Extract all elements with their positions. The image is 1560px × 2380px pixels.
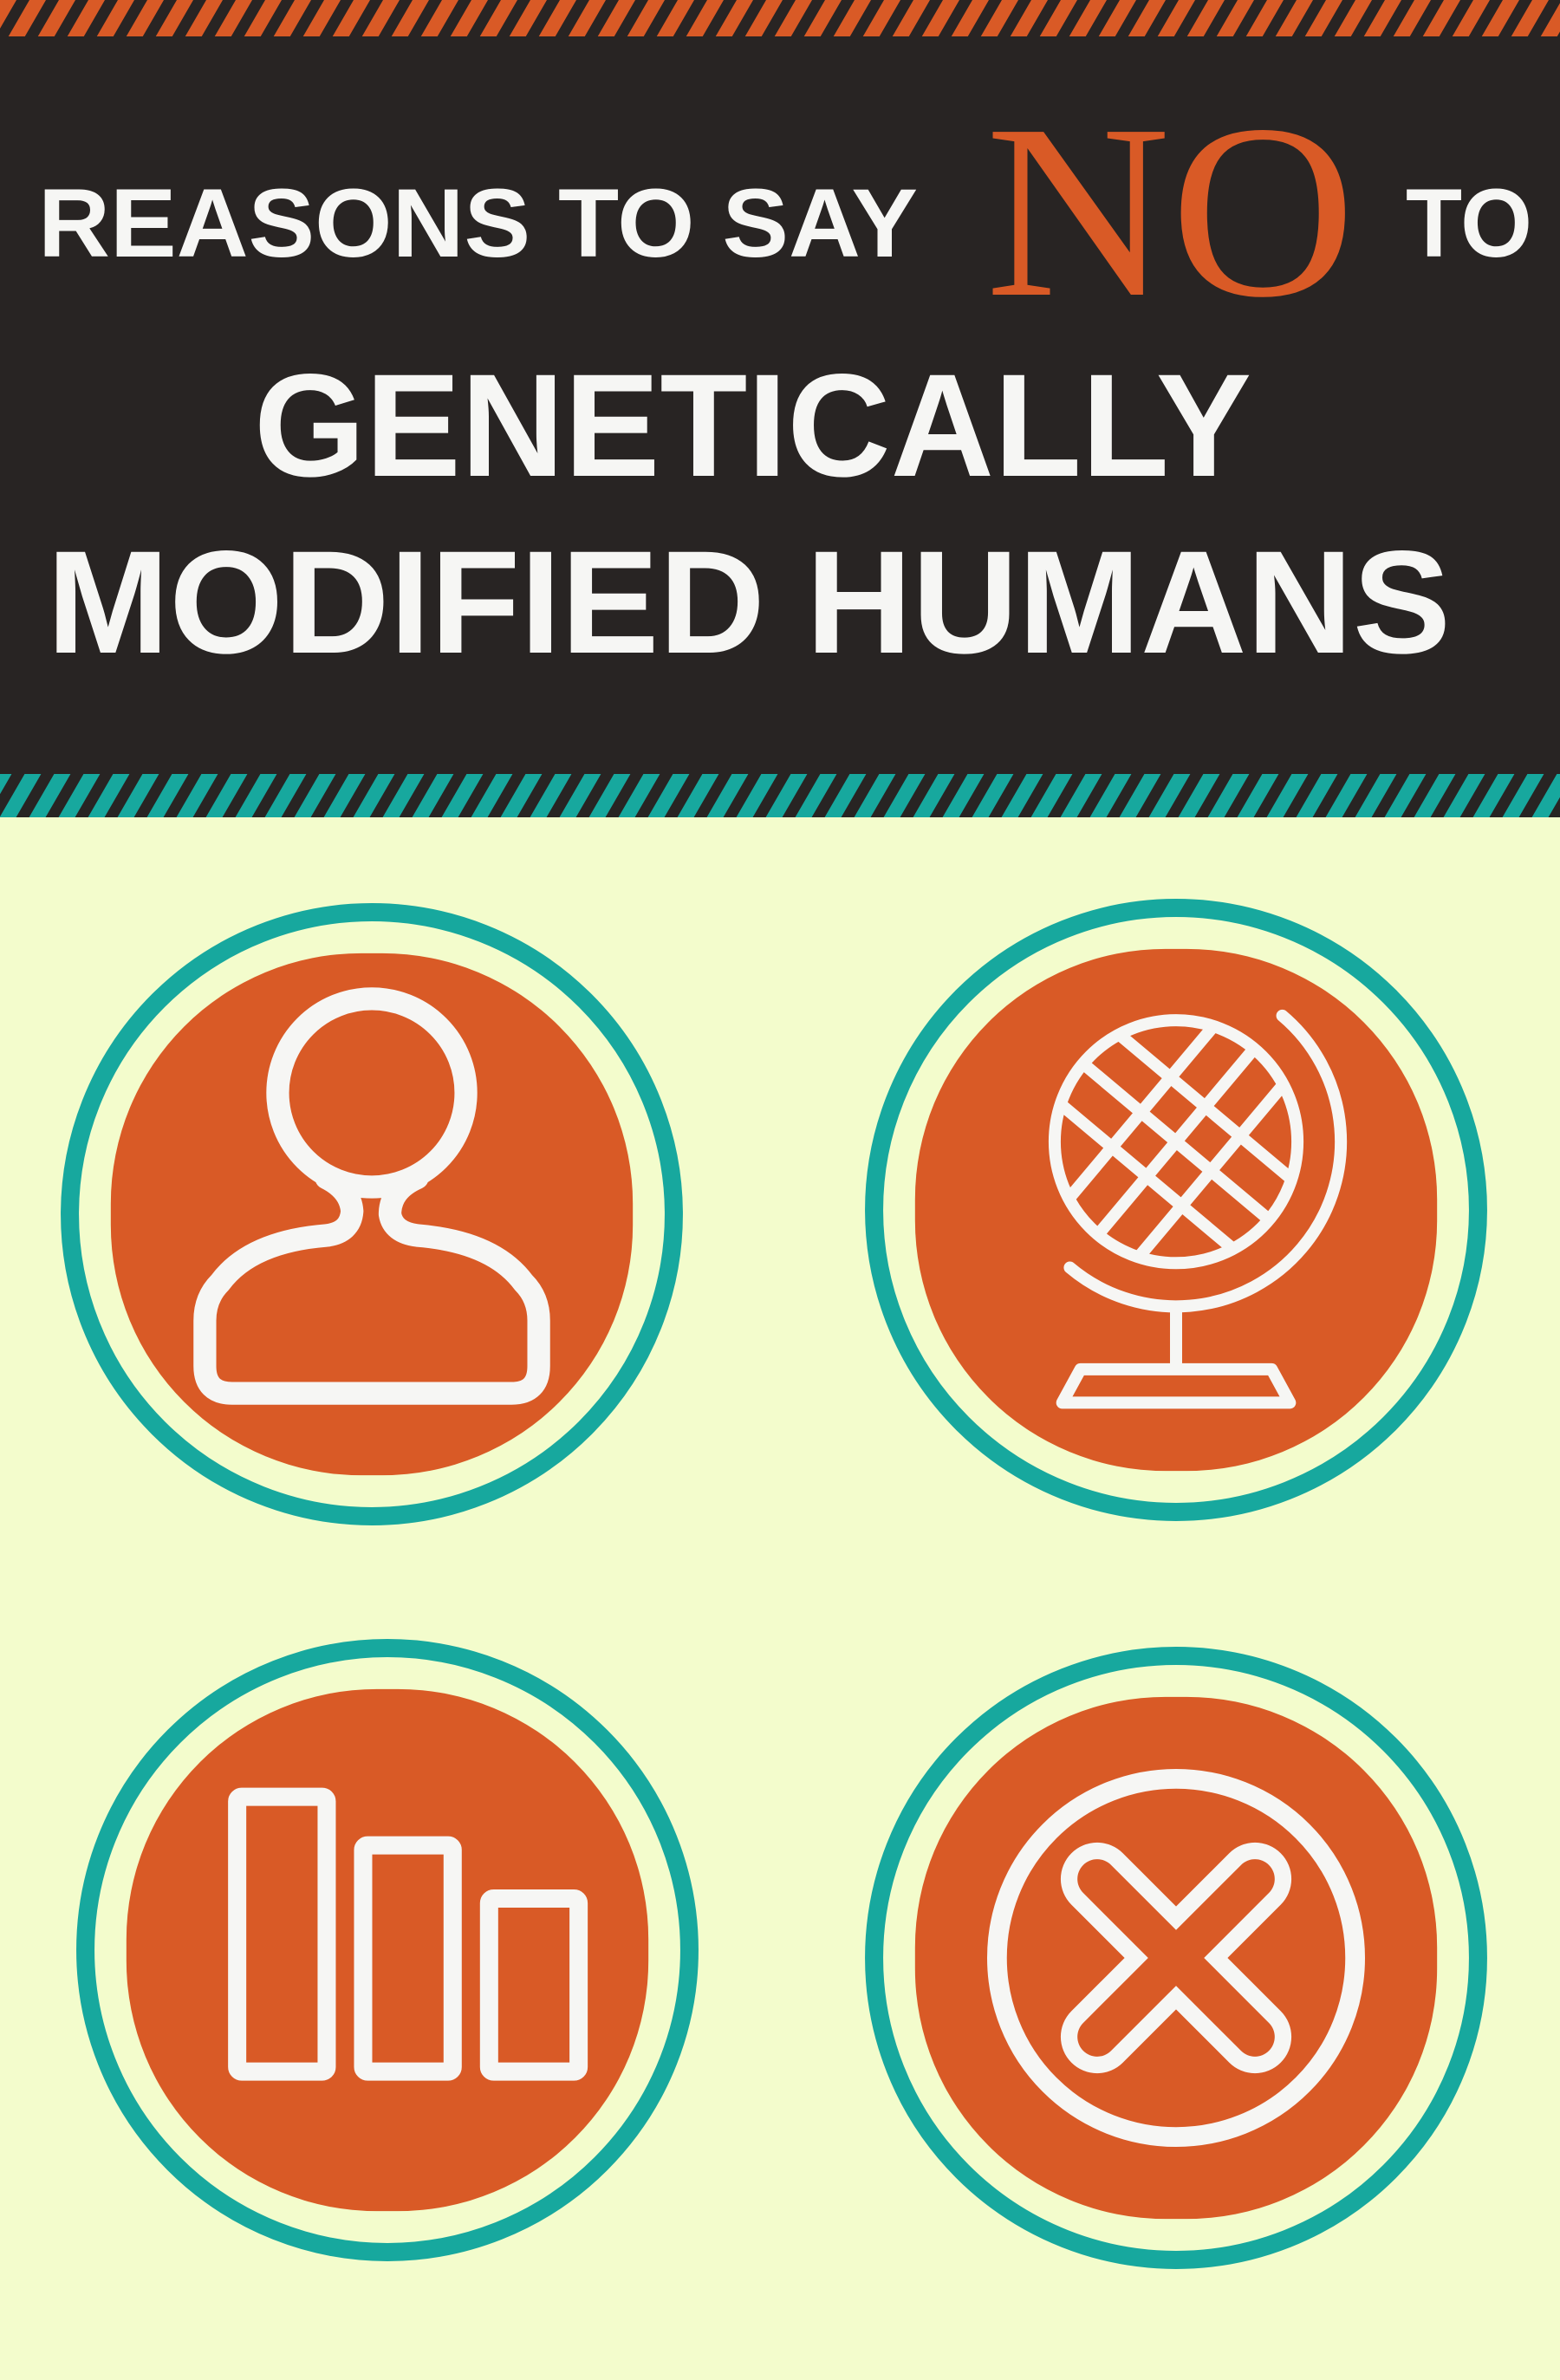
- title: MODIFIED HUMANS: [47, 520, 1451, 684]
- icon circle: x cancel: [874, 1656, 1478, 2260]
- icon circle: globe: [874, 908, 1478, 1512]
- icon circle: person: [70, 913, 673, 1516]
- header panel: [0, 0, 1560, 817]
- title: NO: [985, 74, 1355, 349]
- title: [38, 74, 1532, 684]
- title: GENETICALLY: [254, 343, 1251, 507]
- title: REASONS TO SAY: [38, 169, 918, 277]
- icon circle: bar chart: [86, 1648, 689, 2252]
- title: TO: [1406, 169, 1532, 277]
